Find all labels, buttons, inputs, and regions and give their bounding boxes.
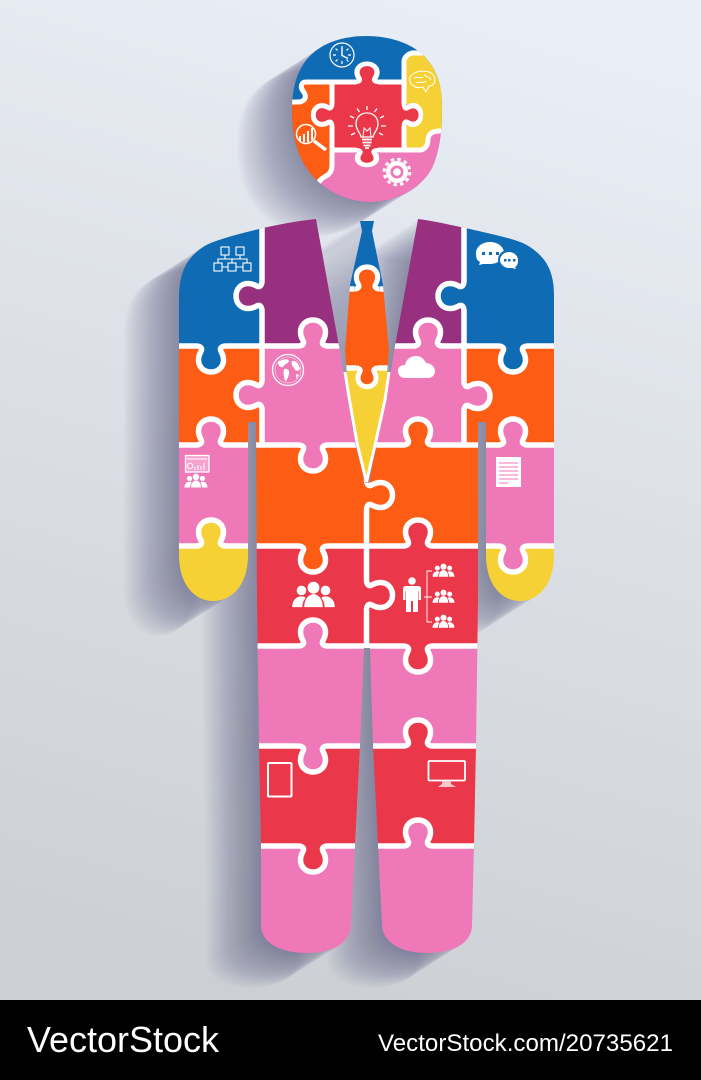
icon: speech bubbles bbox=[476, 242, 518, 270]
colour bands of the suit bbox=[170, 210, 564, 961]
icon: tablet bbox=[268, 763, 292, 796]
icon: gear bbox=[384, 159, 410, 185]
panel: body puzzle pieces bbox=[170, 210, 564, 961]
long drop shadow of figure bbox=[124, 37, 552, 988]
panel: head puzzle pieces bbox=[292, 36, 442, 202]
icon: team bbox=[292, 582, 335, 607]
icon: organisation network bbox=[214, 247, 251, 271]
icon: document bbox=[496, 457, 521, 487]
footer image id: VectorStock.com/20735621 bbox=[378, 1030, 673, 1057]
panel: necktie bbox=[344, 221, 390, 482]
icon: globe bbox=[272, 354, 304, 386]
icon: clock bbox=[330, 43, 354, 67]
icon: manager and teams hierarchy bbox=[403, 564, 454, 628]
icon: magnifier with chart bbox=[296, 124, 326, 150]
puzzle knobs bbox=[196, 281, 528, 872]
footer bar bbox=[0, 1000, 701, 1080]
icon: dashboard and audience on left arm bbox=[184, 456, 209, 488]
puzzle seams bbox=[170, 222, 564, 846]
icon: brain bbox=[410, 71, 435, 92]
footer brand: VectorStock bbox=[27, 1019, 220, 1060]
icon: cloud bbox=[398, 356, 435, 378]
icon: desktop monitor bbox=[428, 761, 465, 787]
icon: light bulb bbox=[348, 106, 386, 148]
